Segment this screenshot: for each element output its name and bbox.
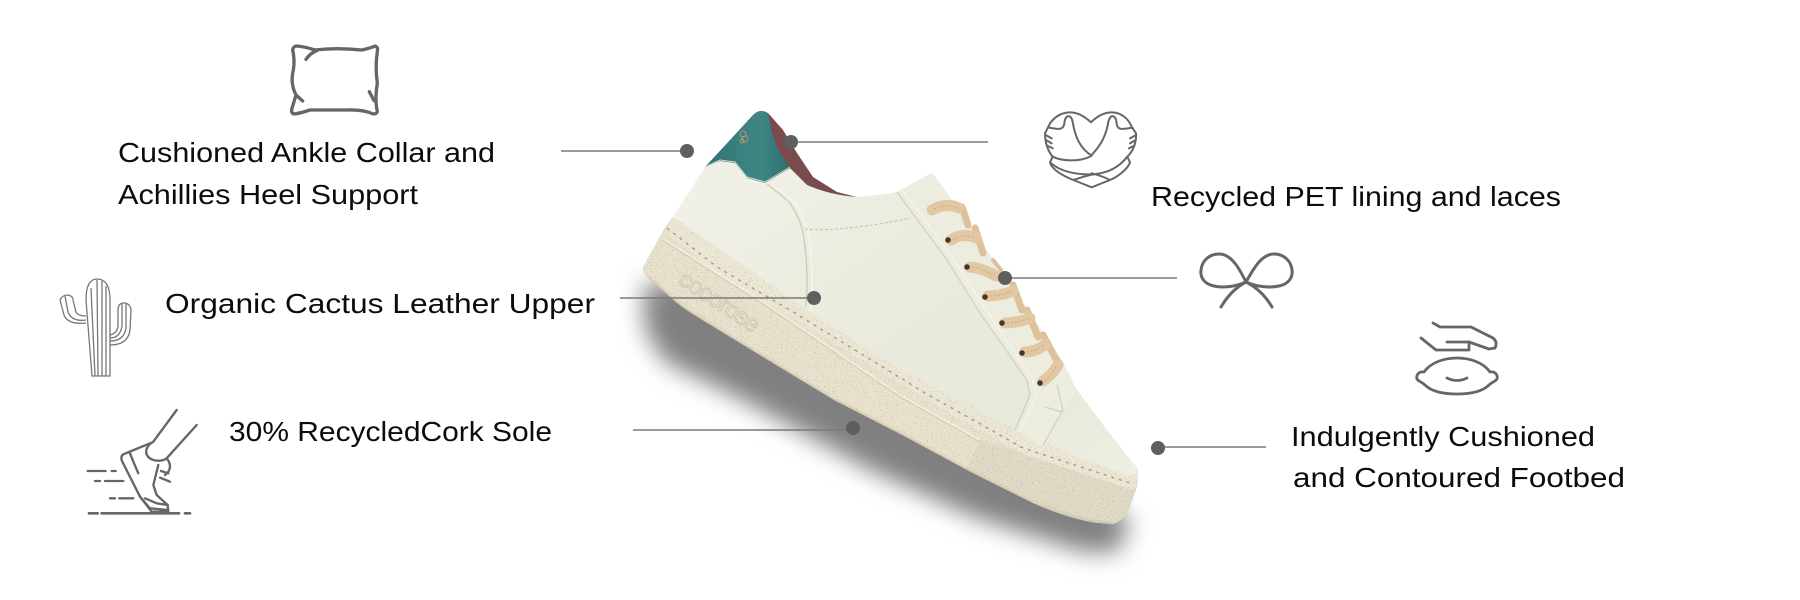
sole logo: cocorose: [674, 265, 765, 339]
text: cactus leather: Organic Cactus Leather Upper: [165, 288, 595, 319]
quarter seam and stitching: [767, 184, 807, 307]
lace eyelets: [945, 237, 1043, 386]
text: ankle collar: [118, 137, 495, 210]
text: footbed: and Contoured Footbed: [1293, 462, 1625, 493]
shoe: [630, 111, 1150, 552]
callout: upper leader: [620, 291, 821, 305]
text: ankle collar: Cushioned Ankle Collar and: [118, 137, 495, 168]
shoe upper: [673, 161, 1138, 475]
icon: hand over baby: [1417, 323, 1497, 394]
text: PET lining: Recycled PET lining and laces: [1151, 181, 1561, 212]
text: footbed: [1291, 421, 1625, 493]
shoe cast shadow: [643, 280, 1130, 552]
icon: running foot: [88, 410, 197, 513]
callout: laces leader: [998, 271, 1177, 285]
eyestay and tongue: [897, 173, 1077, 447]
shoe sole: [643, 217, 1138, 524]
callout: lining leader: [784, 135, 988, 149]
text: ankle collar: Achillies Heel Support: [118, 179, 418, 210]
icon: lace bow: [1201, 254, 1292, 307]
heel logo: [740, 131, 748, 143]
shoe lining: [768, 113, 857, 197]
callout: ankle collar leader: [561, 144, 694, 158]
laces: [932, 205, 1058, 381]
text: cork sole: 30% RecycledCork Sole: [229, 416, 552, 447]
icon: heart hug: [1045, 112, 1136, 187]
icon: pillow: [292, 46, 378, 114]
heel tab: [705, 111, 790, 183]
callout: footbed leader: [1151, 441, 1266, 455]
text: footbed: Indulgently Cushioned: [1291, 421, 1595, 452]
callout: sole leader: [633, 421, 860, 435]
sole details: [644, 218, 1138, 524]
infographic canvas: [59, 44, 1623, 568]
icon: cactus: [60, 279, 131, 376]
